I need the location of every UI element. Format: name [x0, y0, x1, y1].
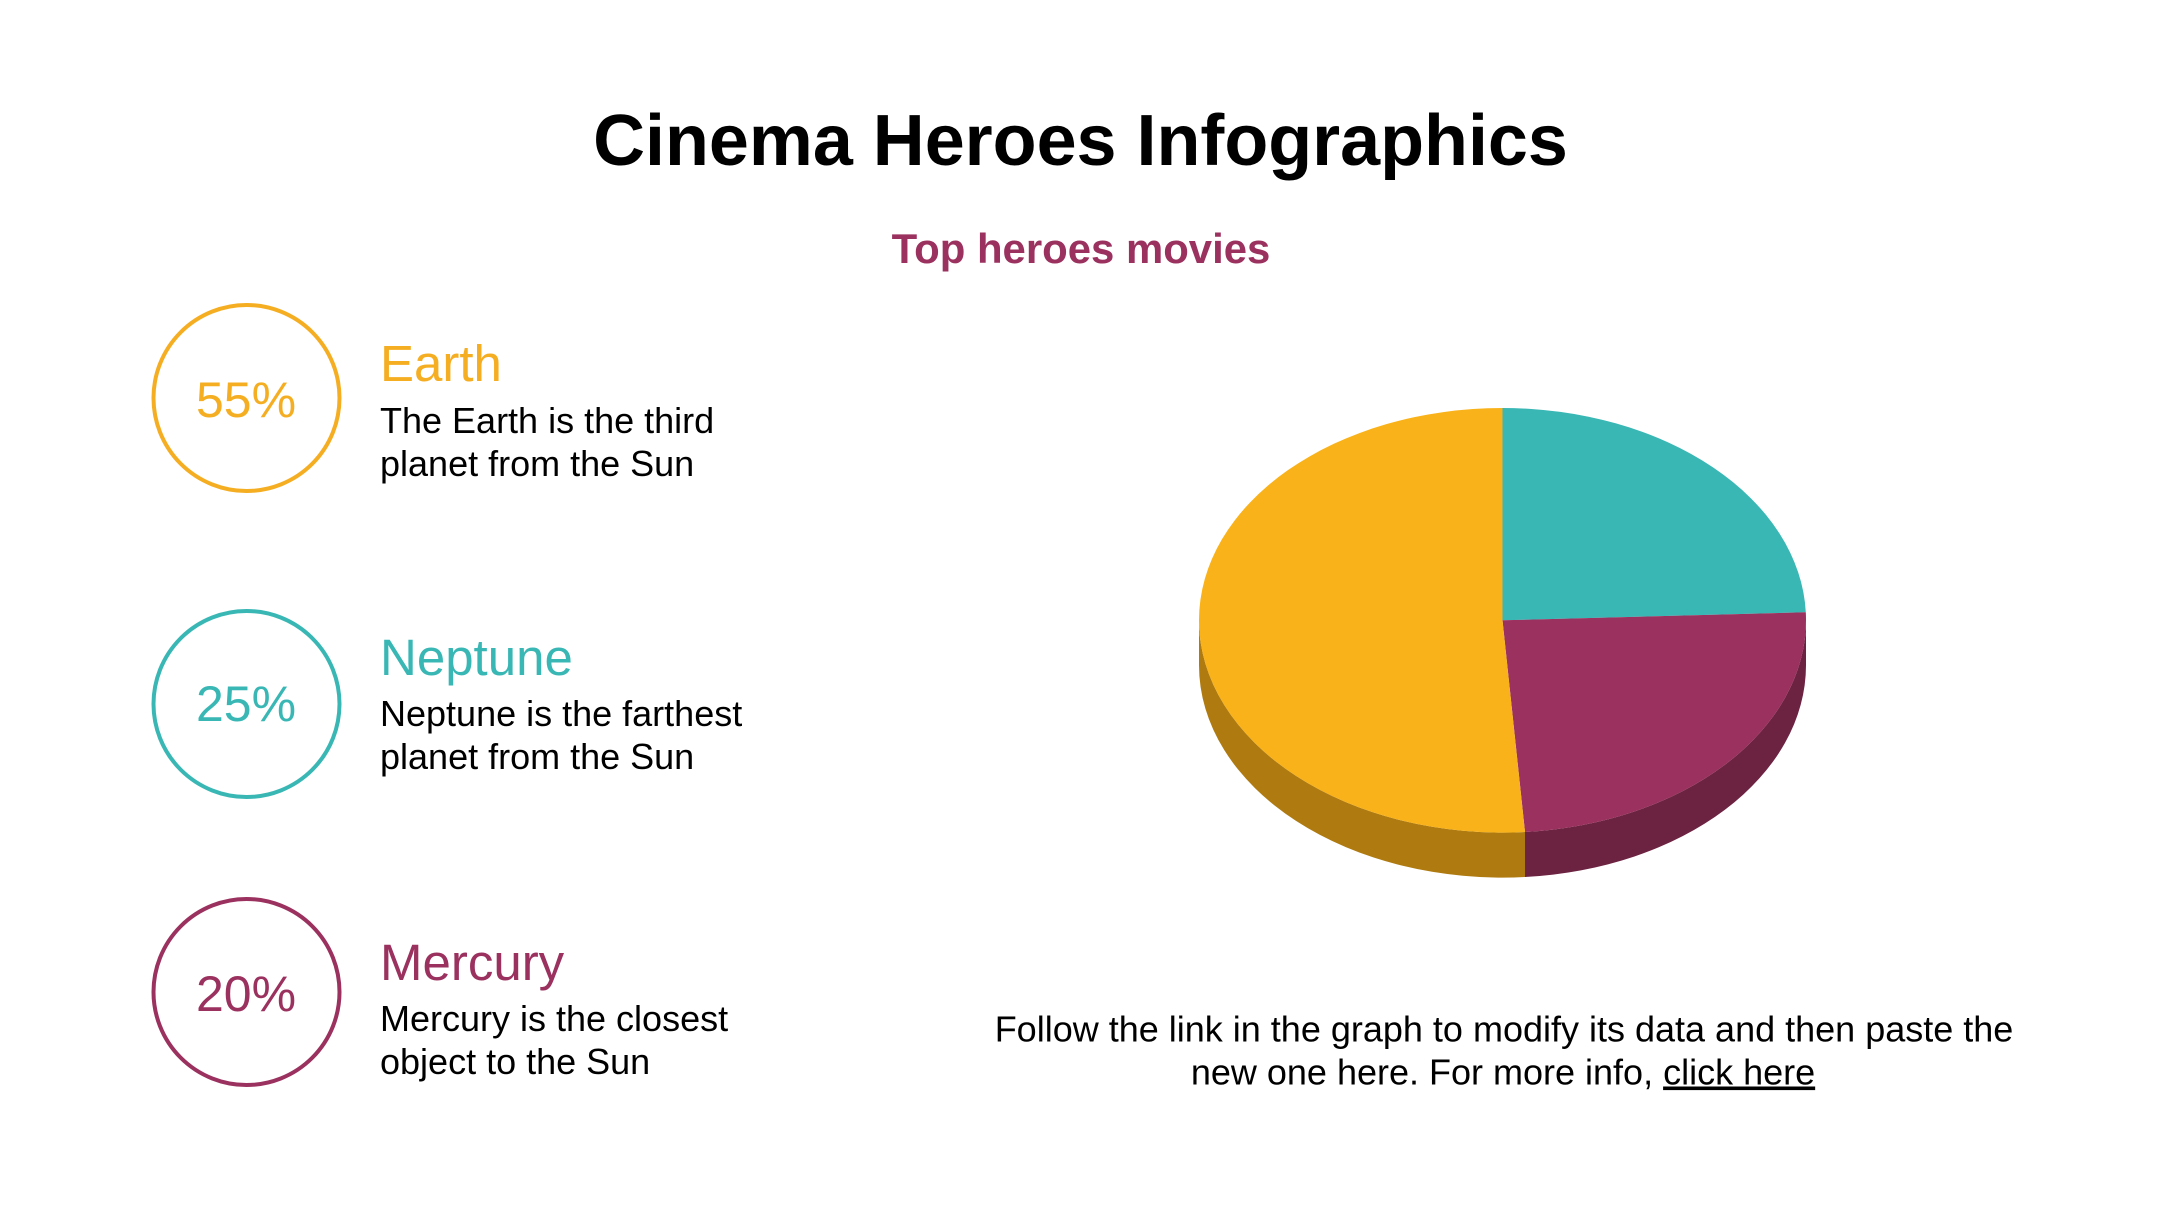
panel: Neptune [154, 611, 742, 797]
Mercury ring with percentage [154, 899, 340, 1085]
Earth heading: Earth [380, 335, 502, 392]
Mercury heading: Mercury [380, 934, 565, 991]
Earth ring with percentage [154, 305, 340, 491]
subtitle: Top heroes movies [892, 225, 1270, 272]
Mercury ring with percentage: 20% [196, 966, 296, 1022]
title: Cinema Heroes Infographics [593, 101, 1568, 181]
3D pie chart [1199, 408, 1806, 878]
Earth ring with percentage: 55% [196, 372, 296, 428]
Earth description: The Earth is the third [380, 400, 714, 441]
panel: Mercury [154, 899, 728, 1085]
panel: Earth [154, 305, 714, 491]
Neptune heading: Neptune [380, 629, 573, 686]
Neptune ring with percentage: 25% [196, 676, 296, 732]
Neptune description: Neptune is the farthest [380, 693, 742, 734]
Neptune ring with percentage [154, 611, 340, 797]
footer note: Follow the link in the graph to modify its data and then paste the [995, 1008, 2013, 1050]
footer note: new one here. For more info, click here [1191, 1052, 1815, 1092]
Neptune description: planet from the Sun [380, 736, 694, 777]
Mercury description: object to the Sun [380, 1041, 650, 1082]
Earth description: planet from the Sun [380, 443, 694, 484]
Mercury description: Mercury is the closest [380, 998, 728, 1039]
